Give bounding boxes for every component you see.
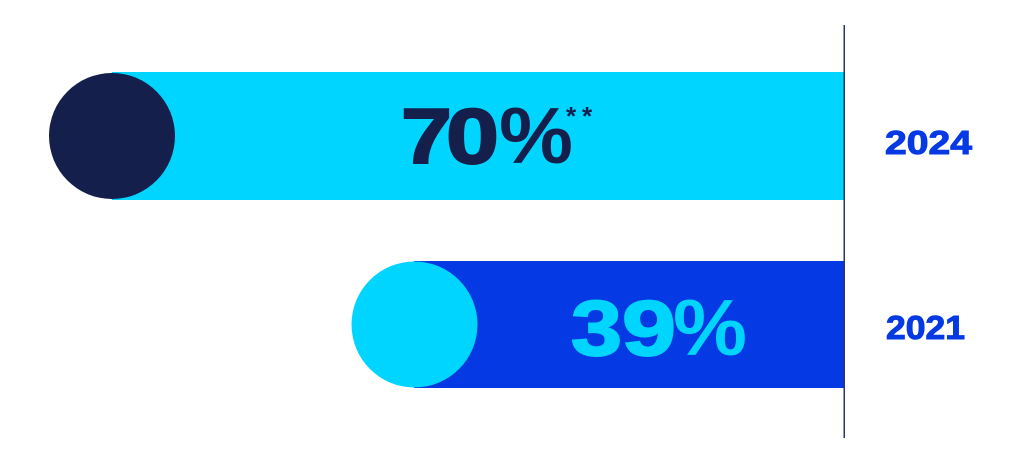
bar: 2024 [49,72,844,200]
value 70% [401,91,573,180]
footnote marker: * [566,101,577,131]
axis line [844,25,845,438]
bar fill 2024 [112,72,844,200]
value 39%: 9 [622,284,676,372]
value 70%: 0 [446,92,499,180]
circle cap 2024 [49,73,175,199]
bar fill 2021 [414,261,844,388]
value 39%: % [673,283,747,372]
bar: 2021 [352,261,844,388]
footnote marker [566,101,593,131]
footnote marker: * [582,101,593,131]
value 70%: % [499,91,573,180]
value 39% [571,283,747,372]
label: 2024: 2024 [885,124,973,161]
value 70%: 7 [401,92,452,180]
label: 2021: 2021 [886,309,965,346]
value 39%: 3 [571,284,622,372]
circle cap 2021 [352,262,478,388]
